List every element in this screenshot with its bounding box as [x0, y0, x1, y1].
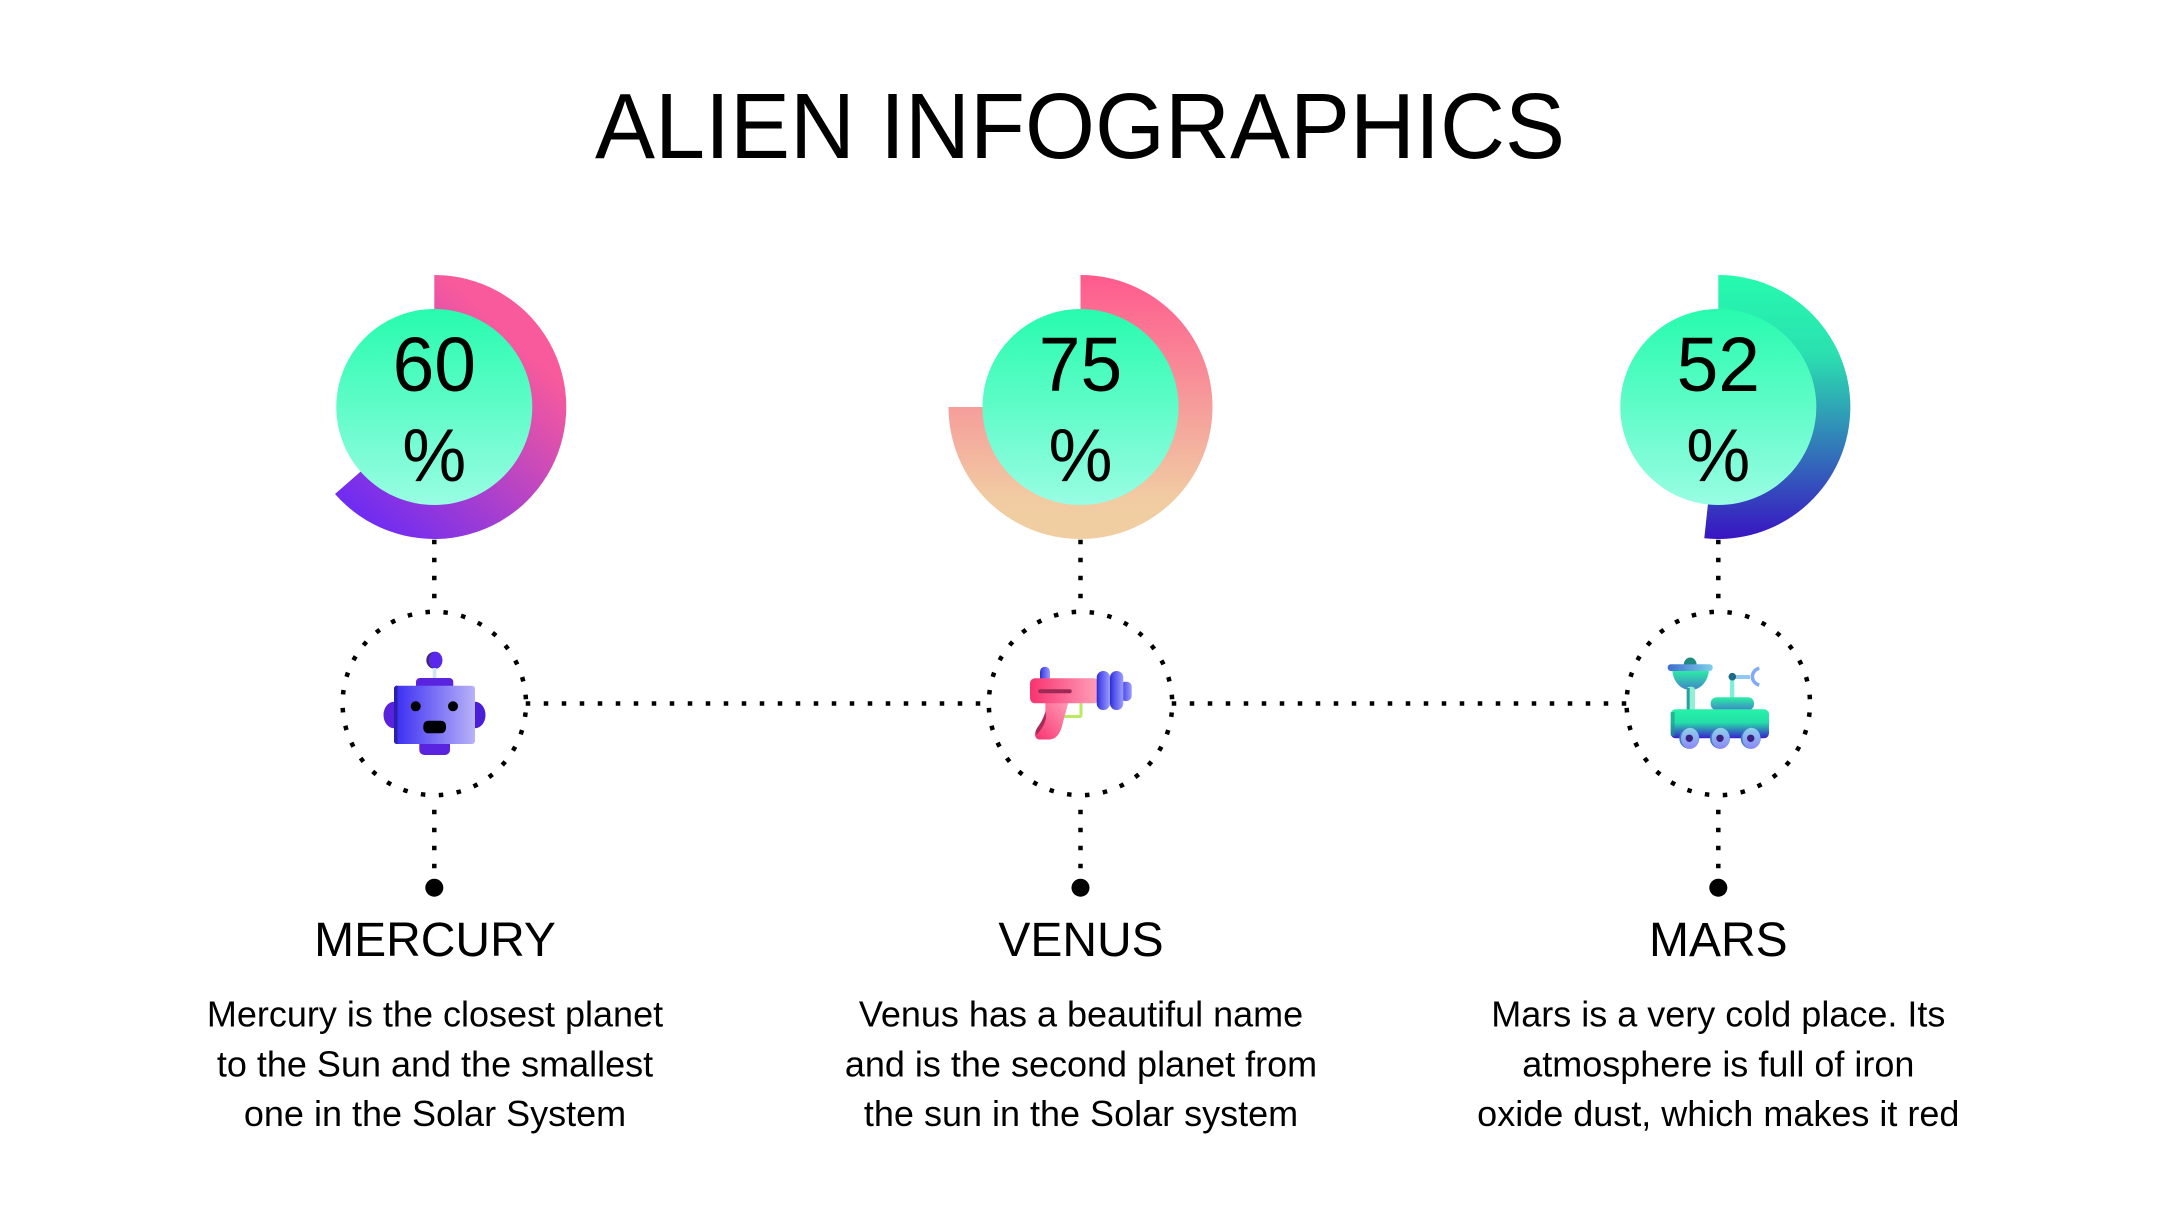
panel: Mars — [1477, 275, 1959, 1134]
panel: Venus — [845, 275, 1317, 1134]
panel: Mercury — [207, 275, 663, 1134]
text block: Mars description — [1477, 994, 1959, 1134]
heading: Mars: MARS — [1649, 914, 1788, 967]
text block: Venus description — [845, 994, 1317, 1134]
end dot — [1709, 879, 1727, 897]
text block: Mercury description: one in the Solar System — [244, 1093, 626, 1134]
donut chart: Venus 75%: 75 — [1039, 322, 1122, 408]
text block: Venus description: Venus has a beautiful name — [859, 994, 1303, 1035]
donut chart: Mercury 60% — [335, 275, 566, 539]
donut chart: Venus 75%: % — [1048, 412, 1113, 497]
title: ALIEN INFOGRAPHICS — [595, 75, 1565, 178]
donut chart: Mars 52%: % — [1686, 412, 1750, 497]
end dot — [1072, 879, 1090, 897]
donut chart: Mercury 60%: 60 — [393, 322, 476, 408]
text block: Mars description: atmosphere is full of iron — [1522, 1043, 1914, 1084]
text block: Mars description: Mars is a very cold place. Its — [1491, 994, 1945, 1035]
donut chart: Mars 52% — [1620, 275, 1850, 539]
heading: Venus: VENUS — [998, 914, 1164, 967]
connector: vertical dotted lines — [1078, 540, 1083, 869]
icon: ray gun — [1030, 667, 1132, 740]
text block: Venus description: the sun in the Solar system — [864, 1093, 1298, 1134]
text block: Mercury description: to the Sun and the smallest — [217, 1043, 653, 1084]
text block: Mars description: oxide dust, which makes it red — [1477, 1093, 1959, 1134]
connector: vertical dotted lines — [1716, 540, 1721, 869]
text block: Mercury description — [207, 994, 663, 1134]
icon: rover — [1668, 658, 1769, 749]
connector: vertical dotted lines — [432, 540, 437, 869]
connector: horizontal dotted line Mercury to Venus — [526, 701, 980, 706]
end dot — [425, 879, 443, 897]
dotted ring — [334, 603, 535, 804]
icon: robot — [384, 652, 486, 755]
donut chart: Mars 52%: 52 — [1677, 322, 1760, 408]
donut chart: Mercury 60%: % — [402, 412, 466, 497]
connector: horizontal dotted line Venus to Mars — [1172, 701, 1626, 706]
donut chart: Venus 75% — [948, 275, 1212, 539]
heading: Mercury: MERCURY — [314, 914, 556, 967]
text block: Mercury description: Mercury is the closest planet — [207, 994, 663, 1035]
dotted ring — [980, 603, 1181, 804]
text block: Venus description: and is the second planet from — [845, 1043, 1317, 1084]
dotted ring — [1618, 603, 1819, 804]
